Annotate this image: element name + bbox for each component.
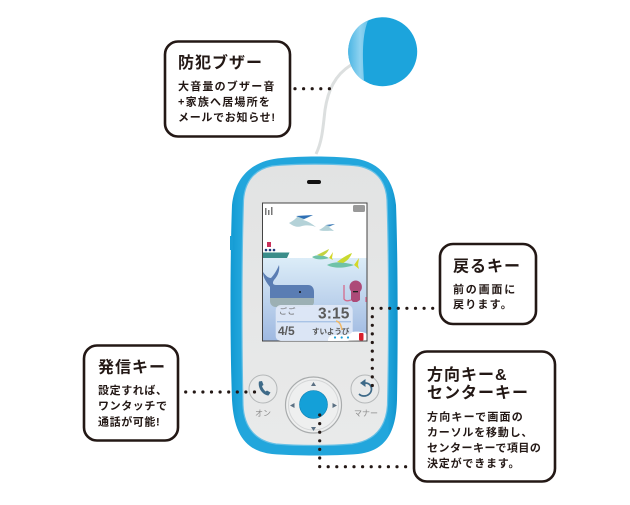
panel: security buzzer: [165, 42, 290, 136]
text block: [453, 282, 517, 311]
text block: 方向キーで画面の: [427, 410, 524, 424]
heading: 方向キー&: [427, 365, 508, 384]
cord of security buzzer: [316, 65, 351, 154]
back key: [351, 375, 379, 403]
flying fish: [312, 249, 359, 269]
clock panel: 4/5: [278, 324, 295, 338]
page indicator tab: [328, 332, 366, 341]
label: manner: マナー: [354, 409, 378, 418]
text block: +家族へ居場所を: [178, 94, 271, 108]
text block: ワンタッチで: [98, 400, 168, 412]
ship: [263, 242, 290, 258]
sea: [263, 258, 366, 340]
heading: 発信キー: [98, 358, 166, 376]
clock panel: 3:15: [318, 306, 350, 322]
dotted leader: buzzer: [295, 87, 330, 90]
status icons: [265, 205, 365, 215]
screen: [262, 203, 367, 341]
dotted leader: call key: [186, 390, 255, 394]
center key: [300, 390, 328, 418]
heading: 防犯ブザー: [178, 53, 263, 72]
text block: カーソルを移動し、: [427, 425, 533, 439]
panel: back key: [440, 244, 536, 324]
text block: [178, 79, 276, 124]
clock panel: すいようび: [312, 326, 350, 336]
heading: センターキー: [427, 384, 529, 402]
clock panel: ごご: [279, 306, 296, 316]
text block: 前の画面に: [453, 282, 517, 296]
text block: 大音量のブザー音: [178, 79, 276, 93]
text block: メールでお知らせ!: [178, 110, 276, 124]
icon: security buzzer button: [348, 17, 417, 86]
clock panel: [276, 305, 353, 341]
panel: call key: [84, 346, 178, 440]
text block: センターキーで項目の: [427, 442, 541, 454]
phone: [230, 156, 398, 456]
direction pad: [286, 377, 342, 433]
panel: direction and center key: [414, 352, 555, 482]
heading: [427, 365, 529, 402]
dotted leader: back key: [372, 308, 433, 386]
label: on: オン: [255, 409, 271, 418]
text block: 通話が可能!: [98, 414, 160, 428]
whale: [263, 265, 314, 307]
text block: 設定すれば、: [98, 383, 168, 397]
text block: [427, 410, 541, 470]
side key: [230, 236, 233, 250]
phone blue shell: [230, 156, 398, 456]
heading: 戻るキー: [453, 258, 521, 276]
birds: [289, 215, 335, 231]
speaker: [307, 180, 321, 184]
text block: [98, 383, 168, 428]
phone white face: [242, 164, 389, 446]
octopus: [344, 280, 366, 302]
call key: [249, 375, 277, 403]
dotted leader: direction key: [320, 415, 406, 467]
text block: 決定ができます。: [427, 456, 520, 470]
text block: 戻ります。: [453, 298, 513, 311]
